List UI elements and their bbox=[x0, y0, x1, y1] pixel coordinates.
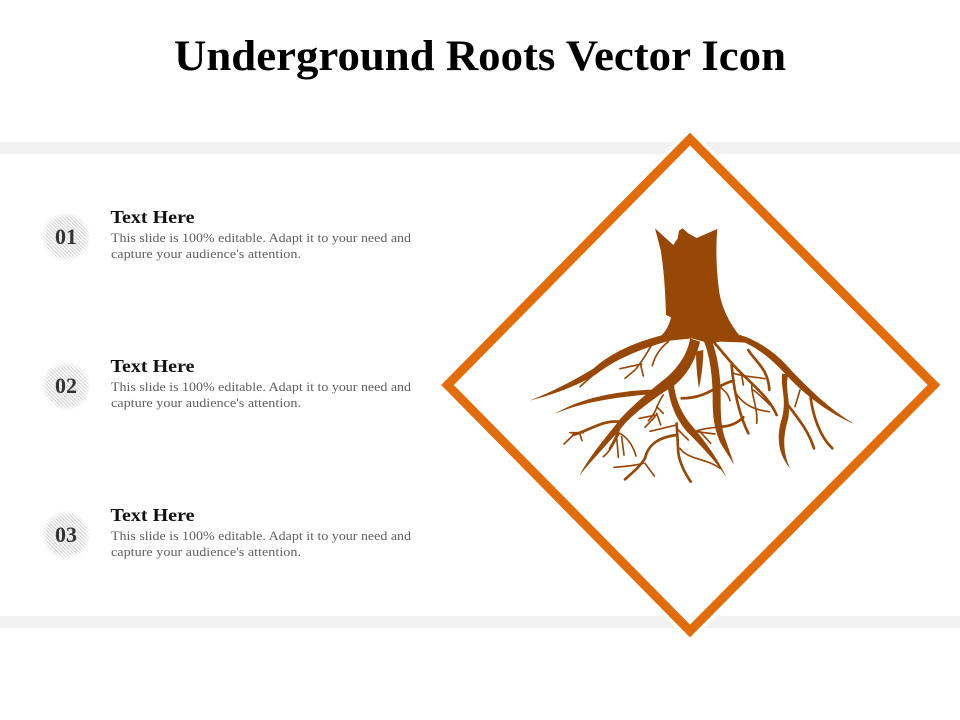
short centre spike bbox=[696, 350, 703, 388]
bottom band bbox=[0, 616, 960, 628]
drop root far right bbox=[779, 373, 790, 468]
icon: tree stump with roots bbox=[529, 228, 854, 482]
number badge 01: 01 bbox=[55, 224, 77, 249]
item description 01 bbox=[111, 230, 412, 261]
item 03 bbox=[42, 509, 411, 558]
root going down from big branch bbox=[668, 385, 727, 478]
item description 02 bbox=[111, 379, 412, 410]
item 02 bbox=[42, 360, 411, 410]
long left branch bbox=[554, 389, 657, 414]
centre root bbox=[704, 342, 734, 465]
number badge 03: 03 bbox=[55, 522, 77, 547]
number badge 01 bbox=[41, 212, 91, 262]
item description 01: This slide is 100% editable. Adapt it to your need and bbox=[111, 230, 412, 245]
main left root bbox=[529, 334, 670, 401]
title: Underground Roots Vector Icon bbox=[174, 33, 786, 80]
thin roots drawn as strokes bbox=[564, 342, 832, 482]
fine branches, medium bbox=[573, 342, 832, 482]
big centre-left root bbox=[579, 338, 700, 476]
item description 03: This slide is 100% editable. Adapt it to your need and bbox=[111, 528, 412, 543]
top band bbox=[0, 142, 960, 154]
item 01 bbox=[42, 211, 411, 260]
item description 02: This slide is 100% editable. Adapt it to your need and bbox=[111, 379, 412, 394]
fine branches, thin bbox=[564, 342, 800, 476]
item description 03 bbox=[111, 528, 412, 559]
number badge 02 bbox=[41, 361, 91, 411]
number badge 02: 02 bbox=[55, 373, 77, 398]
diamond halo bbox=[448, 139, 934, 631]
item description 01: capture your audience's attention. bbox=[111, 246, 301, 261]
right root bbox=[733, 335, 854, 424]
item description 02: capture your audience's attention. bbox=[111, 395, 301, 410]
item heading 02: Text Here bbox=[110, 356, 195, 376]
diamond frame bbox=[448, 139, 934, 631]
stump trunk bbox=[655, 228, 747, 343]
item heading 01: Text Here bbox=[110, 207, 195, 227]
item heading 03: Text Here bbox=[110, 505, 195, 525]
number badge 03 bbox=[41, 510, 91, 560]
item description 03: capture your audience's attention. bbox=[111, 544, 301, 559]
